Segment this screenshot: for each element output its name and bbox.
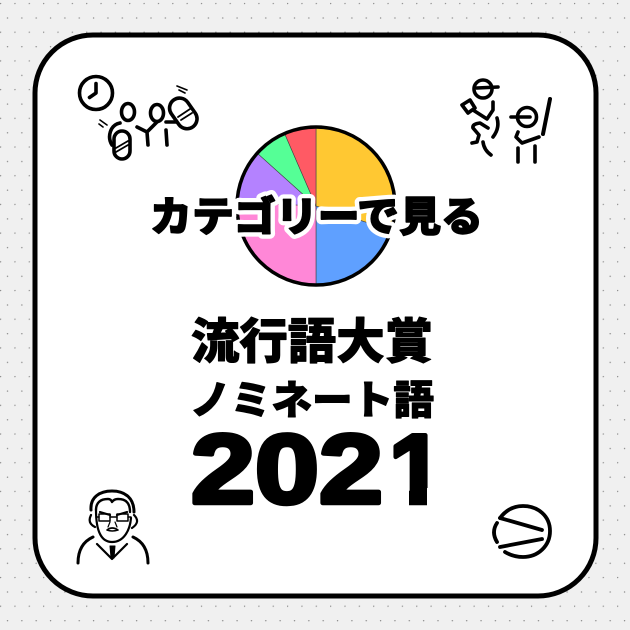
icon: baseball players [462,80,550,162]
icon: man with glasses [78,491,148,563]
category label: カテゴリーで見る [150,194,483,240]
title line 1: 流行語大賞 [191,316,433,369]
icon: ball [494,506,550,557]
title line 2: ノミネート語 [190,379,434,423]
year: 1 [389,414,444,524]
category label: カテゴリーで見る [150,194,483,240]
year: 202 [191,414,383,524]
white rounded card [35,35,596,596]
year [191,414,447,524]
pie chart [237,127,395,285]
icon: clock and interview [80,76,201,159]
